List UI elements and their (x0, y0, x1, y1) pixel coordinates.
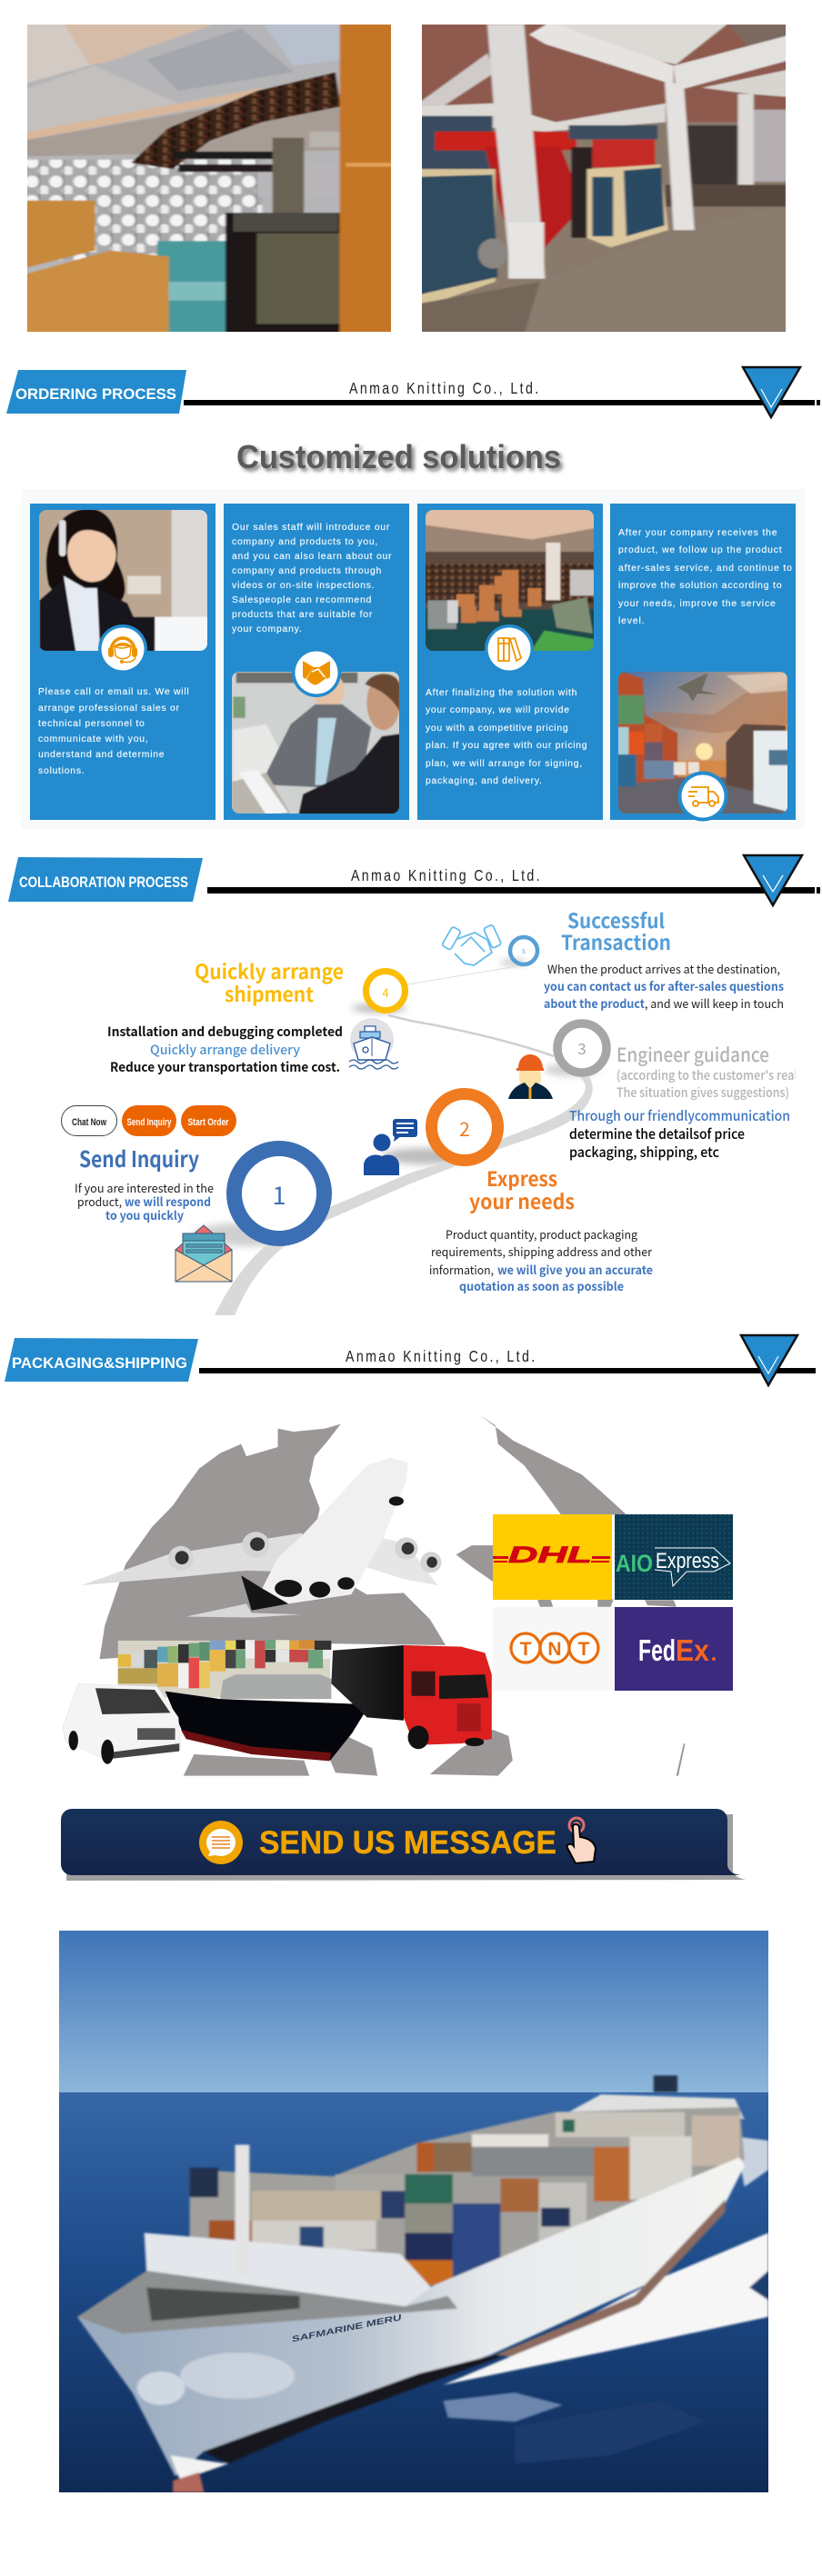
section banner: packaging and shipping (5, 1335, 816, 1385)
buttons: chat, inquiry, order (62, 1105, 236, 1136)
card 2: sales introduction (224, 504, 409, 820)
icon: handshake (292, 648, 341, 697)
section banner: collaboration process: Anmao Knitting Co., Ltd. (351, 868, 542, 884)
logo: DHL (493, 1514, 612, 1600)
shipping illustration: globe, plane, ship, truck, van (63, 1415, 686, 1776)
step 2: express your needs: your needs (469, 1186, 575, 1215)
section banner: collaboration process: COLLABORATION PROCESS (19, 874, 188, 891)
card 1 text: technical personnel to (38, 719, 145, 729)
section banner: packaging and shipping: Anmao Knitting Co., Ltd. (346, 1349, 537, 1365)
step 1: send inquiry: to you quickly (105, 1206, 185, 1223)
icon: cargo ship (349, 1018, 398, 1069)
road curve (194, 960, 599, 1315)
card 3 text: After finalizing the solution with (426, 688, 577, 698)
card 1 text: understand and determine (38, 750, 165, 760)
card 3 text: packaging, and delivery. (426, 776, 543, 786)
step 5: successful transaction: When the product arrives at the destination, (547, 960, 780, 977)
card 4 text: product, we follow up the product (618, 545, 783, 555)
world map continents (100, 1414, 686, 1776)
icon: headset agent (98, 624, 147, 674)
step 1: send inquiry: we will respond (125, 1193, 211, 1210)
icon: envelope with letter (175, 1225, 232, 1282)
step 1: send inquiry: Send Inquiry (79, 1142, 199, 1173)
photo: call centre agent (39, 510, 207, 651)
card 3 text: plan. If you agree with our pricing (426, 741, 587, 751)
step 4: quickly arrange shipment: Quickly arrange (195, 956, 344, 985)
section banner: ordering process: ORDERING PROCESS (15, 385, 176, 403)
step 1: send inquiry: product, (77, 1193, 122, 1210)
logo: TNT (493, 1607, 615, 1691)
button: send us message (61, 1809, 746, 1881)
button: send us message: SEND US MESSAGE (259, 1825, 556, 1861)
card 1 text: solutions. (38, 766, 85, 776)
logo: AIO Express: AIO (616, 1550, 653, 1577)
step 3: engineer guidance: 3 (577, 1036, 586, 1059)
photo: business meeting (232, 672, 399, 814)
card 2 text: and you can also learn about our (232, 552, 392, 562)
logo: AIO Express (615, 1514, 733, 1600)
step 5: successful transaction: , and we will keep in touch (645, 994, 784, 1012)
icon: person with speech bubble (364, 1119, 417, 1175)
photo: container ship at sea (59, 1931, 768, 2492)
logo: FedEx (615, 1607, 733, 1691)
logo: FedEx: Fed (638, 1633, 676, 1667)
card 2 text: Our sales staff will introduce our (232, 523, 390, 533)
step 2: express your needs: quotation as soon as possible (459, 1277, 624, 1294)
card 1 text: Please call or email us. We will (38, 687, 189, 697)
icon: message bubble (199, 1821, 243, 1864)
red truck (331, 1645, 492, 1749)
icon: engineer with helmet (508, 1054, 553, 1099)
section banner: ordering process (6, 367, 820, 417)
section banner: ordering process: Anmao Knitting Co., Ltd. (349, 381, 541, 397)
step 3: engineer guidance: The situation gives suggestions) (616, 1083, 789, 1102)
card 3: pricing plan (417, 504, 603, 820)
card 1 text (38, 687, 189, 776)
step 2: express your needs: Product quantity, product packaging (446, 1225, 638, 1243)
logo: AIO Express: Express (656, 1549, 719, 1573)
step 2: express your needs: we will give you an accurate (497, 1261, 653, 1278)
step 4: quickly arrange shipment: Installation and debugging completed (107, 1023, 343, 1041)
step 5: successful transaction: Transaction (561, 927, 671, 956)
step 5: successful transaction: about the product (544, 994, 645, 1012)
factory photo: red machine workshop (422, 25, 786, 332)
icon: books (485, 624, 534, 674)
step 1: send inquiry: 1 (273, 1176, 286, 1212)
logo: TNT: T (520, 1639, 532, 1660)
icon: pointing hand (567, 1818, 596, 1863)
logo: TNT: N (547, 1639, 562, 1660)
photo: container ship at sea: SAFMARINE MERU (291, 2313, 404, 2344)
container ship (118, 1640, 369, 1761)
step 3: engineer guidance: determine the detailsof price (569, 1124, 745, 1143)
card 2 text: Salespeople can recommend (232, 595, 372, 605)
heading: customized solutions: Customized solutions (236, 438, 561, 475)
card 4 text: After your company receives the (618, 528, 777, 538)
card 2 text: company and products to you, (232, 537, 378, 547)
card 4 text: your needs, improve the service (618, 599, 777, 609)
airplane (81, 1458, 441, 1618)
card 2 text (232, 523, 392, 634)
card 2 text: products that are suitable for (232, 610, 373, 620)
card 3 text: plan, we will arrange for signing, (426, 759, 583, 769)
card 2 text: your company. (232, 624, 303, 634)
card 3 text (426, 688, 587, 786)
logo: TNT: T (578, 1639, 590, 1660)
step 4: quickly arrange shipment: 4 (382, 983, 389, 1001)
step 4: quickly arrange shipment (107, 956, 406, 1076)
step 5: successful transaction: Successful (567, 905, 665, 934)
step 5: successful transaction: you can contact us for after-sales questions (544, 977, 784, 994)
step 2: express your needs: information, (429, 1261, 494, 1278)
step 4: quickly arrange shipment: Reduce your transportation time cost. (110, 1058, 340, 1076)
icon: delivery truck (678, 771, 727, 822)
card 4 text: improve the solution according to (618, 581, 783, 591)
step 4: quickly arrange shipment: Quickly arrange delivery (150, 1041, 300, 1059)
step 3: engineer guidance: packaging, shipping, etc (569, 1143, 719, 1162)
card 4: after-sales (610, 504, 796, 822)
card 2 text: company and products through (232, 566, 382, 576)
card 4 text: level. (618, 616, 645, 626)
logo: DHL: DHL (508, 1543, 592, 1568)
step 2: express your needs: 2 (459, 1115, 470, 1143)
step 1: send inquiry (62, 1105, 324, 1282)
buttons: chat, inquiry, order: Start Order (187, 1117, 229, 1128)
step 5: successful transaction (442, 905, 784, 1012)
step 2: express your needs (364, 1094, 653, 1294)
step 2: express your needs: Express (486, 1163, 557, 1193)
logo: FedEx: Ex (676, 1633, 710, 1667)
card 1 text: communicate with you, (38, 734, 148, 744)
process roadmap (62, 905, 806, 1315)
step 3: engineer guidance: Through our friendlycommunication (569, 1106, 790, 1125)
photo: warehouse with boxes (426, 510, 594, 651)
step 5: successful transaction: 5 (522, 947, 526, 956)
card 3 text: you with a competitive pricing (426, 724, 568, 734)
step 3: engineer guidance (508, 1023, 806, 1162)
factory photo: knitting machines (27, 25, 391, 332)
section banner: packaging and shipping: PACKAGING&SHIPPING (12, 1354, 187, 1372)
card 2 text: videos or on-site inspections. (232, 581, 375, 591)
card 1 text: arrange professional sales or (38, 704, 180, 714)
step 4: quickly arrange shipment: shipment (225, 979, 314, 1008)
card 1: contact (30, 504, 216, 820)
step 3: engineer guidance: Engineer guidance (616, 1041, 769, 1068)
card 4 text (618, 528, 793, 626)
step 2: express your needs: requirements, shipping address and other (431, 1243, 653, 1260)
step 1: send inquiry: If you are interested in the (75, 1179, 214, 1196)
photo: logistics at sunset (618, 672, 787, 814)
section banner: collaboration process (8, 855, 820, 905)
white van (63, 1683, 181, 1764)
panel: customized solution cards (22, 489, 805, 829)
card 3 text: your company, we will provide (426, 705, 570, 715)
buttons: chat, inquiry, order: Chat Now (72, 1117, 106, 1128)
icon: outlined handshake (442, 924, 502, 965)
buttons: chat, inquiry, order: Send Inquiry (127, 1117, 172, 1128)
card 4 text: after-sales service, and continue to (618, 564, 793, 574)
